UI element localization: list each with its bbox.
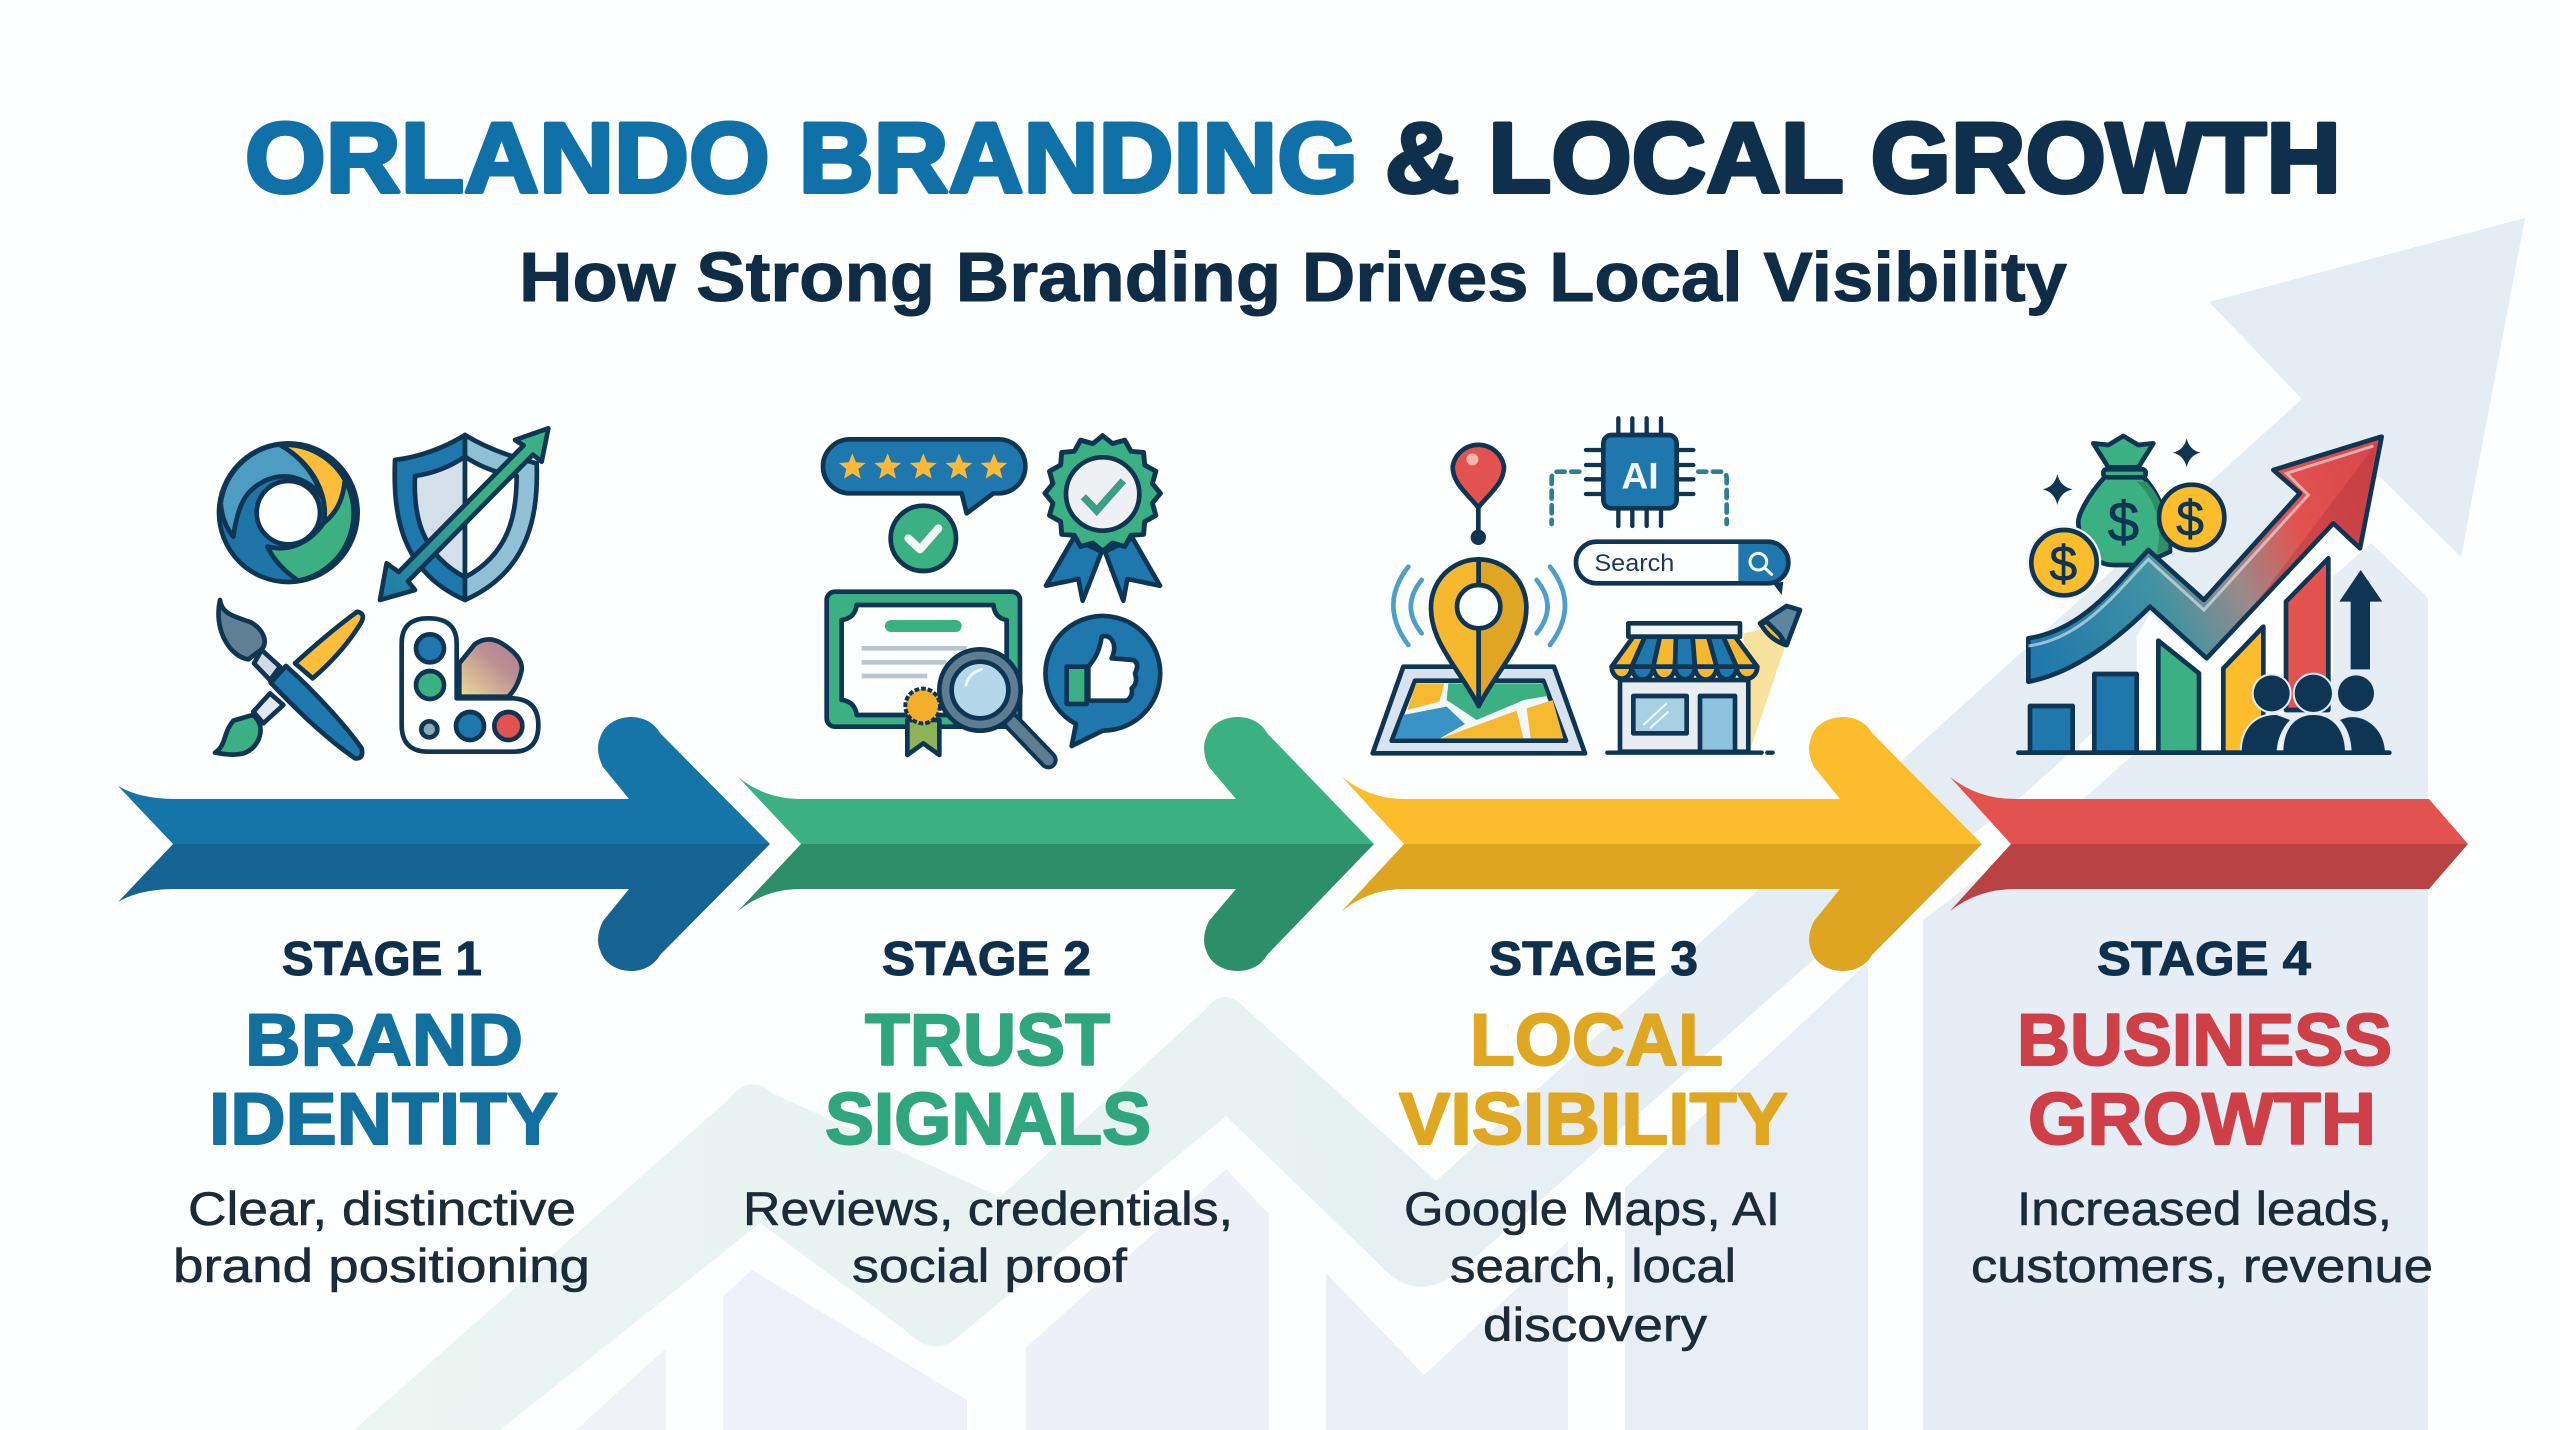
stage 4 heading: BUSINESS <box>2017 1000 2392 1081</box>
stage 1 description: Clear, distinctive <box>188 1182 576 1235</box>
icon: gold coins <box>2027 485 2224 600</box>
arrow: stage 4 <box>1950 777 2468 911</box>
arrow: stage 1 <box>118 717 770 971</box>
stage 3 description: Google Maps, AI <box>1404 1182 1780 1235</box>
icon: chart baseline <box>2018 746 2389 760</box>
icon: people <box>2242 675 2385 753</box>
stage 2 heading: TRUST <box>865 1000 1110 1081</box>
stage 4 text <box>1971 933 2433 1292</box>
stage 2 heading: SIGNALS <box>825 1079 1151 1160</box>
icon: magnifying glass <box>939 649 1048 760</box>
stage 4 description: Increased leads, <box>2017 1182 2392 1235</box>
icon: map <box>1373 667 1585 753</box>
icon: thumbs-up bubble <box>1045 616 1160 746</box>
stage 2 description: Reviews, credentials, <box>743 1182 1233 1235</box>
icon: check badge <box>891 506 956 571</box>
icon: certificate <box>827 592 1020 727</box>
stage 4 heading: GROWTH <box>2028 1079 2376 1160</box>
icon group: trust signals <box>823 436 1160 760</box>
subtitle: How Strong Branding Drives Local Visibility <box>519 238 2067 316</box>
stage 4 description <box>1971 1182 2433 1292</box>
icon: gold coins: $ <box>2176 490 2204 546</box>
arrow: stage 2 <box>738 717 1374 971</box>
title: ORLANDO BRANDING <box>245 102 1358 213</box>
icon: money bag: $ <box>2108 492 2139 555</box>
icon: AI chip: AI <box>1621 454 1659 496</box>
stage 4 heading <box>2017 1000 2392 1160</box>
icon: search bar <box>1576 542 1788 595</box>
background: faded growth chart and arrow <box>354 218 2525 1430</box>
icon: crossed paint brushes <box>215 600 363 758</box>
stage 2 label: STAGE 2 <box>882 933 1091 986</box>
arrow: stage 3 <box>1342 717 1982 971</box>
stage 3 description <box>1404 1182 1780 1351</box>
stage 4 label: STAGE 4 <box>2097 933 2311 986</box>
icon: search bar: Search <box>1594 550 1674 577</box>
stage 3 heading: VISIBILITY <box>1399 1079 1788 1160</box>
icon: seal ribbon <box>905 689 940 755</box>
icon: gold coins: $ <box>2049 536 2077 592</box>
icon: large location pin <box>1431 559 1526 706</box>
stage 3 heading <box>1399 1000 1788 1160</box>
stage 4 description: customers, revenue <box>1971 1239 2433 1292</box>
icon: storefront with spotlight <box>1607 606 1800 753</box>
icon: rising trend arrow <box>2028 437 2382 682</box>
stage 1 label: STAGE 1 <box>282 933 482 986</box>
icon: five-star review bubble <box>823 439 1025 513</box>
icon: money bag <box>2078 436 2170 565</box>
icon: brand logo circle <box>219 443 358 582</box>
stage 1 heading <box>209 1000 558 1160</box>
stage 2 heading <box>825 1000 1151 1160</box>
stage 1 description <box>173 1182 590 1292</box>
stage 3 description: search, local <box>1450 1239 1736 1292</box>
stage 1 text <box>173 933 590 1292</box>
icon group: local visibility <box>1373 418 1800 753</box>
icon: small up arrow <box>2339 570 2382 669</box>
title <box>245 102 2341 213</box>
stage 3 description: discovery <box>1483 1298 1708 1351</box>
stage 2 text <box>743 933 1233 1292</box>
icon: AI chip <box>1552 418 1727 526</box>
stage 1 heading: IDENTITY <box>209 1079 558 1160</box>
stage 2 description: social proof <box>852 1239 1128 1292</box>
icon: sparkles <box>2043 438 2201 505</box>
stage 3 heading: LOCAL <box>1470 1000 1723 1081</box>
stage 3 label: STAGE 3 <box>1489 933 1698 986</box>
icon: colour palette <box>402 618 538 752</box>
icon: signal arcs <box>1393 567 1565 645</box>
icon: red pin <box>1453 445 1504 545</box>
stage 2 description <box>743 1182 1233 1292</box>
icon: award rosette <box>1045 436 1160 601</box>
icon: shield with arrow <box>380 428 548 600</box>
stage 1 heading: BRAND <box>245 1000 523 1081</box>
stage 3 text <box>1399 933 1788 1351</box>
stage 1 description: brand positioning <box>173 1239 590 1292</box>
icon group: brand identity <box>215 428 548 758</box>
icon group: business growth <box>2018 436 2389 753</box>
icon: growth bars <box>2030 523 2353 753</box>
title: & LOCAL GROWTH <box>1385 102 2341 213</box>
